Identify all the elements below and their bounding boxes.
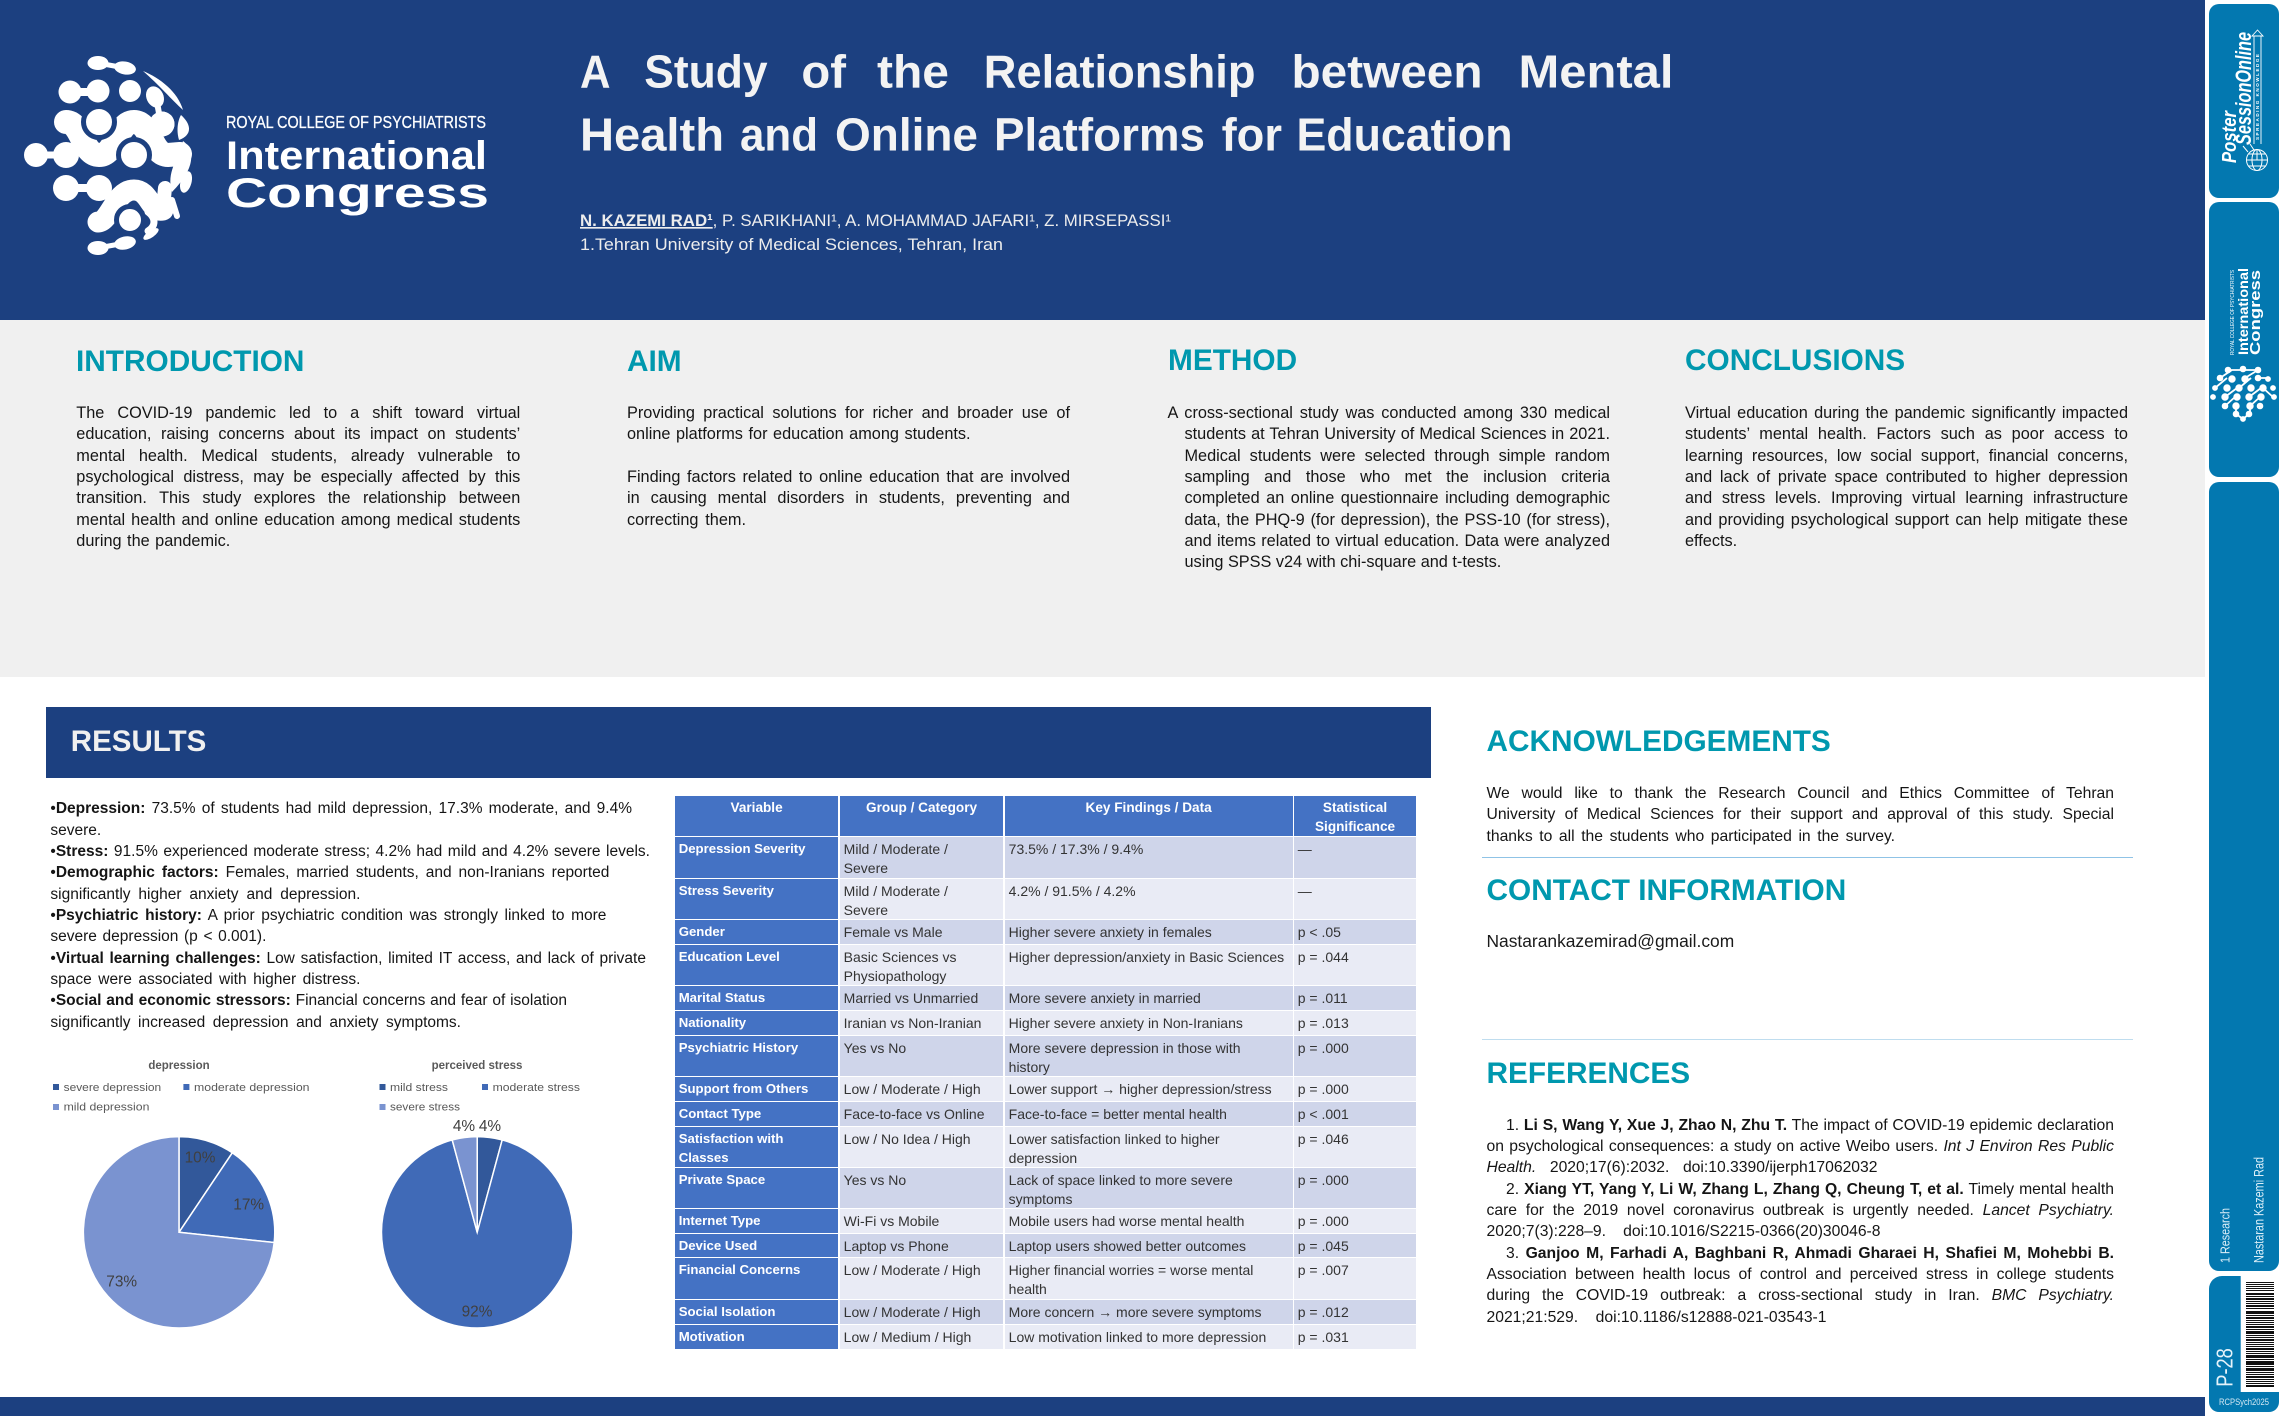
text block: acknowledgements: thanks to all the students who participated in the survey. [1486,828,1895,845]
text block: introduction: mental health and online education among medical students [76,511,520,529]
text block: conclusions: Virtual education during the pandemic significantly impacted [1685,404,2128,422]
row: psychiatric history: More severe depression in those with [1009,1040,1241,1056]
row: internet type: Mobile users had worse mental health [1009,1213,1244,1229]
text block: introduction: education, raising concerns about its impact on students’ [76,425,520,443]
pie chart: depression: depression [148,1060,210,1072]
row: education level: p = .044 [1298,949,1349,965]
title: Platforms [994,109,1205,161]
pie chart: perceived stress [380,1060,580,1328]
row: satisfaction with classes: Lower satisfaction linked to higher [1009,1131,1220,1147]
legend: perceived stress [380,1082,580,1114]
row: satisfaction with classes: depression [1009,1150,1077,1166]
row: satisfaction with classes [675,1127,1416,1167]
row: depression severity: Mild / Moderate / [844,841,948,857]
text block: acknowledgements [1486,785,2114,845]
legend: perceived stress: moderate stress [493,1082,580,1094]
text block: results bullets: significantly increased depression and anxiety symptoms. [50,1014,461,1031]
heading: references: REFERENCES [1486,1056,1690,1090]
row: contact type [675,1102,1416,1126]
row: social isolation: Social Isolation [679,1304,775,1319]
row: marital status [675,986,1416,1010]
row: private space: Lack of space linked to more severe [1009,1172,1233,1188]
row: depression severity: Depression Severity [679,841,806,856]
row: financial concerns: Financial Concerns [679,1262,800,1277]
table header row: Group / Category [866,800,977,815]
text block: aim: Finding factors related to online education that are involved [627,468,1070,486]
row: stress severity: — [1298,883,1312,899]
title: Mental [1518,46,1674,98]
row: social isolation: p = .012 [1298,1304,1349,1320]
pie chart: depression: 17% [233,1196,264,1213]
row: social isolation [675,1300,1416,1324]
icon: globe of linked blobs [24,56,194,255]
logo wordmark: Congress [226,169,489,216]
header band [0,0,2204,320]
text block: acknowledgements: University of Medical Sciences for their support and approval of this study. Special [1486,806,2114,823]
row: depression severity [675,837,1416,878]
row: gender [675,920,1416,944]
text block: conclusions: and stress levels. Improving virtual learning infrastructure [1685,489,2128,507]
icon: globe [2243,144,2268,170]
row: contact type: Contact Type [679,1106,761,1121]
legend: perceived stress: mild stress [390,1082,448,1094]
pie chart: depression: 73% [106,1274,137,1291]
row: social isolation: More concern → more severe symptoms [1009,1304,1262,1320]
logo: Poster Session Online: SPREADING KNOWLEDGE [2255,54,2260,140]
row: device used: Laptop users showed better outcomes [1009,1238,1246,1254]
pie chart: depression [53,1060,310,1328]
text block: results bullets: •Social and economic stressors: Financial concerns and fear of isolation [50,992,567,1009]
title: Education [1296,109,1512,161]
table header row: Statistical [1323,800,1387,815]
row: motivation: Low / Medium / High [844,1329,971,1345]
authors and affiliation: N. KAZEMI RAD¹, P. SARIKHANI¹, A. MOHAMMAD JAFARI¹, Z. MIRSEPASSI¹ [580,211,1171,230]
logo: Poster Session Online: Poster [2219,110,2241,163]
logo: wordmark: International [2235,268,2251,355]
title: of [801,46,847,98]
legend: depression [53,1082,310,1114]
row: psychiatric history: history [1009,1059,1050,1075]
row: support from others: Lower support → higher depression/stress [1009,1081,1272,1097]
text block: method: Medical students were selected through simple random [1184,447,1610,465]
text block: method: A cross-sectional study was conducted among 330 medical [1168,404,1610,422]
row: support from others: Low / Moderate / High [844,1081,981,1097]
logo: wordmark: Congress [2247,270,2264,355]
row: private space: Private Space [679,1172,765,1187]
row: support from others: p = .000 [1298,1081,1349,1097]
text block: conclusions [1685,404,2128,550]
row: satisfaction with classes: Low / No Idea / High [844,1131,971,1147]
row: stress severity: 4.2% / 91.5% / 4.2% [1009,883,1136,899]
title: Relationship [984,46,1256,98]
row: stress severity: Stress Severity [679,883,774,898]
row: nationality [675,1011,1416,1035]
row: device used: Device Used [679,1238,757,1253]
text block: aim: Providing practical solutions for richer and broader use of [627,404,1070,422]
text block: method: data, the PHQ-9 (for depression), the PSS-10 (for stress), [1184,511,1610,529]
text block: conclusions: and lack of private space contributed to higher depression [1685,468,2128,486]
row: psychiatric history: Psychiatric History [679,1040,798,1055]
row: satisfaction with classes: Satisfaction with [679,1131,783,1146]
pie chart: perceived stress: perceived stress [432,1060,522,1072]
icon: linked dots globe [2211,367,2276,421]
row: stress severity: Severe [844,902,888,918]
row: education level: Physiopathology [844,968,946,984]
row: nationality: Nationality [679,1015,746,1030]
logo wordmark: International [226,134,487,178]
row: support from others [675,1077,1416,1101]
row: depression severity: — [1298,841,1312,857]
row: marital status: More severe anxiety in married [1009,990,1201,1006]
text block: aim: correcting them. [627,511,746,529]
row: education level [675,945,1416,985]
text block: introduction: transition. This study explores the relationship between [76,489,520,507]
row: marital status: p = .011 [1298,990,1348,1006]
row: stress severity: Mild / Moderate / [844,883,948,899]
row: device used: p = .045 [1298,1238,1349,1254]
text block: references: during the COVID-19 outbreak: a cross-sectional study in Iran. BMC Psychiatry. [1486,1287,2114,1304]
category label: 1 Research [2218,1208,2232,1263]
text block: conclusions: effects. [1685,532,1737,550]
row: depression severity: Severe [844,860,888,876]
text block: acknowledgements: We would like to thank the Research Council and Ethics Committee of Tehran [1486,785,2114,802]
row: device used: Laptop vs Phone [844,1238,949,1254]
text block: references: care for the 2019 novel coronavirus outbreak is urgently needed. Lancet Psychiatry. [1486,1202,2114,1219]
legend: depression: severe depression [64,1082,161,1094]
text block: results bullets: •Stress: 91.5% experienced moderate stress; 4.2% had mild and 4.2% severe levels. [50,843,650,860]
text block: results bullets: severe. [50,822,101,839]
row: motivation [675,1325,1416,1349]
text block: results bullets: •Demographic factors: Females, married students, and non-Iranians reported [50,864,609,881]
row: marital status: Marital Status [679,990,765,1005]
row: motivation: p = .031 [1298,1329,1349,1345]
text block: references: 2020;7(3):228–9. doi:10.1016/S2215-0366(20)30046-8 [1486,1223,1880,1240]
row: private space: Yes vs No [844,1172,906,1188]
text block: results bullets: •Virtual learning challenges: Low satisfaction, limited IT access, and lack of private [50,950,646,967]
text block: references: Association between health locus of control and perceived stress in college students [1486,1266,2114,1283]
title: A [580,46,610,98]
heading: introduction: INTRODUCTION [76,344,304,378]
logo: wordmark [2230,268,2264,355]
row: motivation: Motivation [679,1329,745,1344]
panel: introduction row background [0,320,2204,677]
row: internet type [675,1209,1416,1233]
row: education level: Higher depression/anxiety in Basic Sciences [1009,949,1284,965]
row: nationality: Iranian vs Non-Iranian [844,1015,981,1031]
text block: references: 1. Li S, Wang Y, Xue J, Zhao N, Zhu T. The impact of COVID-19 epidemic declaration [1506,1117,2114,1134]
text block: introduction: during the pandemic. [76,532,230,550]
row: nationality: Higher severe anxiety in Non-Iranians [1009,1015,1243,1031]
row: motivation: Low motivation linked to more depression [1009,1329,1266,1345]
authors and affiliation: 1.Tehran University of Medical Sciences, Tehran, Iran [580,235,1003,254]
row: nationality: p = .013 [1298,1015,1349,1031]
text block: introduction: mental health. Medical students, already vulnerable to [76,447,520,465]
row: internet type: Wi-Fi vs Mobile [844,1213,939,1229]
row: stress severity [675,879,1416,919]
text block: method: completed an online questionnaire including demographic [1184,489,1610,507]
authors and affiliation [580,211,1171,254]
text block: conclusions: and providing psychological support can help mitigate these [1685,511,2128,529]
text block: method: sampling and those who met the inclusion criteria [1184,468,1610,486]
text block: aim: online platforms for education among students. [627,425,971,443]
row: internet type: Internet Type [679,1213,761,1228]
title: the [877,46,949,98]
text block: introduction: psychological distress, may be especially affected by this [76,468,520,486]
heading: results band [46,707,1431,778]
text block: aim: in causing mental disorders in students, preventing and [627,489,1070,507]
pie chart: perceived stress: 4% [453,1118,475,1135]
text block: results bullets: •Psychiatric history: A prior psychiatric condition was strongly linked to more [50,907,606,924]
text block: results bullets: significantly higher anxiety and depression. [50,886,360,903]
text block: references: 2021;21:529. doi:10.1186/s12888-021-03543-1 [1486,1309,1826,1326]
pie chart: perceived stress: 92% [462,1304,493,1321]
row: private space: p = .000 [1298,1172,1349,1188]
logo: Royal College of Psychiatrists International Congress [24,56,489,255]
table header row: Key Findings / Data [1086,800,1212,815]
text block: aim [627,404,1070,529]
logo wordmark: ROYAL COLLEGE OF PSYCHIATRISTS [226,112,486,132]
text block: method: and items related to virtual education. Data were analyzed [1184,532,1610,550]
title: between [1292,46,1482,98]
sidebar: poster session online tab [2209,4,2279,198]
row: financial concerns: health [1009,1281,1047,1297]
sidebar: international congress tab [2209,202,2279,477]
table header row [675,796,1416,836]
legend: perceived stress: severe stress [390,1102,460,1114]
heading: acknowledgements: ACKNOWLEDGEMENTS [1486,724,1831,758]
legend: depression: mild depression [64,1102,149,1114]
row: support from others: Support from Others [679,1081,808,1096]
bottom bar [0,1397,2204,1416]
row: psychiatric history: Yes vs No [844,1040,906,1056]
title: and [740,109,818,161]
row: gender: p < .05 [1298,924,1341,940]
logo: Poster Session Online [2219,30,2268,170]
conference tag: RCPSych2025 [2219,1397,2269,1408]
text block: results bullets [50,800,650,1031]
row: contact type: Face-to-face = better mental health [1009,1106,1227,1122]
poster number: P-28 [2212,1348,2238,1387]
row: depression severity: 73.5% / 17.3% / 9.4% [1009,841,1143,857]
table header row: Significance [1315,819,1395,834]
author name: Nastaran Kazemi Rad [2252,1157,2266,1263]
row: financial concerns: p = .007 [1298,1262,1349,1278]
table header row: Variable [730,800,783,815]
title: Health [580,109,724,161]
text block: conclusions: learning resources, low social support, financial concerns, [1685,447,2128,465]
text block: introduction [76,404,520,550]
text block: references: Health. 2020;17(6):2032. doi:10.3390/ijerph17062032 [1486,1159,1878,1176]
row: marital status: Married vs Unmarried [844,990,978,1006]
text block: method: students at Tehran University of Medical Sciences in 2021. [1184,425,1610,443]
pie chart: depression: 10% [185,1150,216,1167]
text block: method: using SPSS v24 with chi-square and t-tests. [1184,553,1501,571]
row: internet type: p = .000 [1298,1213,1349,1229]
row: education level: Basic Sciences vs [844,949,956,965]
row: gender: Higher severe anxiety in females [1009,924,1212,940]
heading: conclusions: CONCLUSIONS [1685,344,1905,377]
row: psychiatric history [675,1036,1416,1076]
row: education level: Education Level [679,949,780,964]
text block: results bullets: •Depression: 73.5% of students had mild depression, 17.3% moderate, and 9.4% [50,800,632,817]
row: satisfaction with classes: p = .046 [1298,1131,1349,1147]
heading: aim: AIM [627,344,682,378]
legend: depression: moderate depression [194,1082,310,1094]
heading: contact information: CONTACT INFORMATION [1486,874,1846,907]
contact email: Nastarankazemirad@gmail.com [1486,931,1734,951]
heading: method: METHOD [1168,344,1297,377]
text block: references: 2. Xiang YT, Yang Y, Li W, Zhang L, Zhang Q, Cheung T, et al. Timely mental health [1506,1181,2114,1198]
title: Online [835,109,978,161]
barcode [2246,1282,2274,1387]
text block: references: on psychological consequences: a study on active Weibo users. Int J Environ Res Public [1486,1138,2114,1155]
text block: method [1168,404,1610,571]
row: satisfaction with classes: Classes [679,1150,729,1165]
text block: introduction: The COVID-19 pandemic led to a shift toward virtual [76,404,520,422]
text block: results bullets: space were associated with higher distress. [50,971,360,988]
row: contact type: p < .001 [1298,1106,1349,1122]
row: private space: symptoms [1009,1191,1072,1207]
row: gender: Female vs Male [844,924,942,940]
logo: wordmark: ROYAL COLLEGE OF PSYCHIATRISTS [2230,270,2236,355]
row: contact type: Face-to-face vs Online [844,1106,985,1122]
row: private space [675,1168,1416,1208]
logo wordmark [226,112,489,216]
row: financial concerns [675,1258,1416,1299]
text block: conclusions: students’ mental health. Factors such as poor access to [1685,425,2128,443]
row: financial concerns: Low / Moderate / High [844,1262,981,1278]
title: for [1222,109,1282,161]
row: psychiatric history: p = .000 [1298,1040,1349,1056]
text block: results bullets: severe depression (p < 0.001). [50,928,266,945]
title [580,46,1674,161]
table: results by variable [675,796,1416,1349]
text block: references [1486,1117,2114,1326]
row: gender: Gender [679,924,725,939]
row: device used [675,1234,1416,1257]
text block: references: 3. Ganjoo M, Farhadi A, Baghbani R, Ahmadi Gharaei H, Shafiei M, Mohebbi B. [1506,1245,2114,1262]
heading: results band: RESULTS [71,725,206,758]
title: Study [644,46,768,98]
pie chart: perceived stress: 4% [479,1118,501,1135]
row: financial concerns: Higher financial worries = worse mental [1009,1262,1253,1278]
row: social isolation: Low / Moderate / High [844,1304,981,1320]
